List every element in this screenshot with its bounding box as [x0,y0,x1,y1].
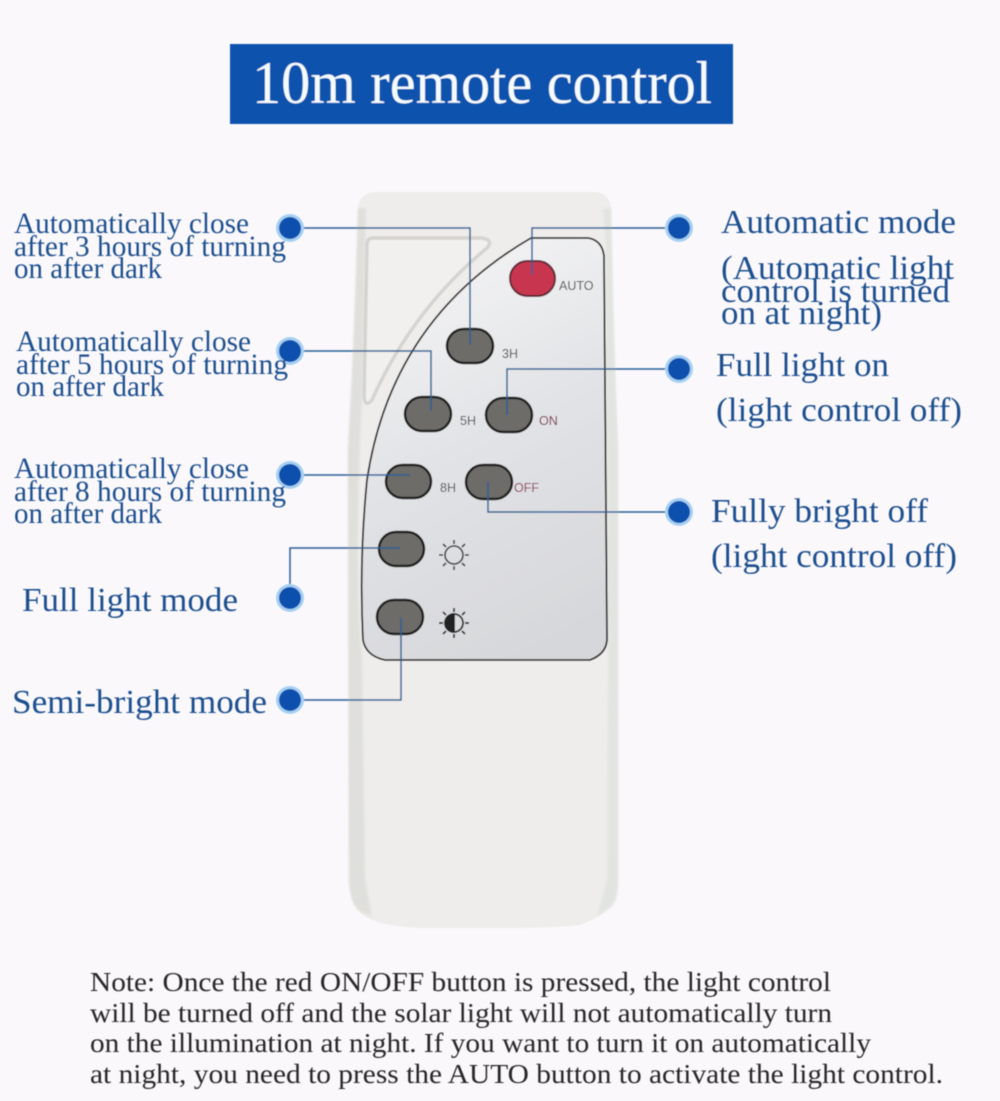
label: close after 8 hours: after 8 hours of turning [14,475,286,508]
silver control panel [362,238,607,660]
label: close after 5 hours: after 5 hours of turning [16,348,288,381]
label: fully bright off [711,493,957,575]
label: semi-bright mode: Semi-bright mode [12,684,267,721]
button labels: 3H [502,347,518,361]
label: close after 3 hours: Automatically close [14,207,249,240]
label: automatic mode: (Automatic light [721,250,955,287]
button: ON [486,398,532,432]
label: close after 8 hours: Automatically close [14,452,249,485]
label: close after 5 hours: Automatically close [16,325,251,358]
button: OFF [466,465,512,499]
label: fully bright off: Fully bright off [711,493,929,530]
label: close after 3 hours: on after dark [14,252,162,285]
button labels: AUTO [559,279,594,293]
left side bevel [348,208,372,916]
label: close after 5 hours: on after dark [16,370,164,403]
label: close after 5 hours [16,325,288,403]
label: automatic mode: Automatic mode [721,204,956,241]
right side bevel [597,208,618,916]
label: full light on [716,347,962,429]
label: automatic mode [721,204,956,332]
leader lines [290,228,679,700]
button labels: ON [539,414,558,428]
note: at night, you need to press the AUTO button to activate the light control. [90,1059,943,1089]
label: automatic mode: on at night) [721,295,882,332]
button labels: 5H [460,414,476,428]
remote control [348,192,618,928]
button: 3H [447,329,493,363]
button labels [440,279,594,495]
label: close after 3 hours: after 3 hours of turning [14,230,286,263]
note: on the illumination at night. If you want to turn it on automatically [90,1028,872,1058]
remote body [348,192,618,928]
icon: full sun [439,540,469,570]
label: close after 8 hours: on after dark [14,497,162,530]
label: automatic mode: control is turned [721,273,950,310]
button: 8H [386,465,431,498]
marker dots [276,214,693,714]
button: 5H [405,397,451,431]
label: full light on: (light control off) [716,392,962,429]
note [90,967,943,1089]
note: will be turned off and the solar light will not automatically turn [90,998,833,1028]
label: full light mode: Full light mode [22,582,238,619]
title banner: 10m remote control [252,50,712,116]
battery cover recess [364,238,490,403]
note: Note: Once the red ON/OFF button is pressed, the light control [90,967,831,997]
button: full light [379,532,424,566]
button: auto [510,261,555,296]
label: fully bright off: (light control off) [711,538,957,575]
icon: half sun [439,608,469,638]
button: semi bright [377,600,423,634]
label: close after 8 hours [14,452,286,530]
label: close after 3 hours [14,207,286,285]
button labels: OFF [514,481,539,495]
label: full light on: Full light on [716,347,889,384]
button labels: 8H [440,481,456,495]
